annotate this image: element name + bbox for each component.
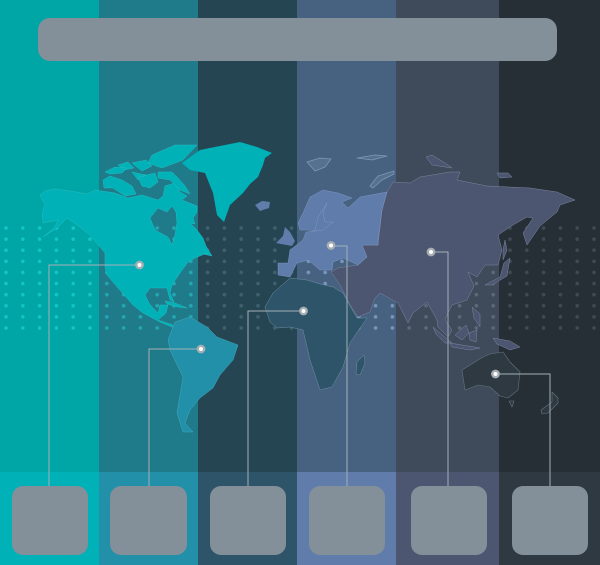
marker: Asia	[428, 249, 434, 255]
label box 3	[210, 486, 286, 555]
islands: Southeast Asia	[433, 307, 520, 350]
label box 5	[411, 486, 487, 555]
island: Tasmania	[509, 401, 514, 407]
continent: Australia	[462, 352, 520, 398]
world map	[40, 142, 575, 432]
bottom colour band	[0, 472, 600, 565]
label box 6	[512, 486, 588, 555]
continent: South America	[168, 317, 238, 432]
title bar	[38, 18, 557, 61]
arctic islands	[307, 155, 394, 188]
connector line: North America	[49, 265, 139, 486]
island: Iceland	[255, 201, 270, 211]
label box 1	[12, 486, 88, 555]
label box 2	[110, 486, 187, 555]
marker: North America	[136, 262, 143, 268]
marker: South America	[198, 346, 204, 352]
marker: Australia	[492, 371, 499, 377]
connector line: Asia	[431, 252, 448, 486]
marker: Africa	[300, 308, 307, 314]
continent: Asia	[331, 155, 575, 337]
marker: Europe	[328, 242, 334, 249]
dot grid	[0, 222, 600, 334]
continent: Greenland	[182, 142, 272, 222]
continent: North America	[40, 145, 212, 327]
continent: Africa	[265, 278, 367, 390]
label box 4	[309, 486, 385, 555]
connector line: South America	[149, 349, 201, 486]
connector line: Africa	[248, 311, 303, 486]
connector line: Australia	[495, 374, 550, 486]
island: Madagascar	[356, 355, 365, 375]
island: United Kingdom	[276, 227, 295, 246]
connector line: Europe	[331, 246, 347, 486]
island: New Zealand	[541, 392, 558, 414]
continent: Europe	[278, 190, 387, 277]
